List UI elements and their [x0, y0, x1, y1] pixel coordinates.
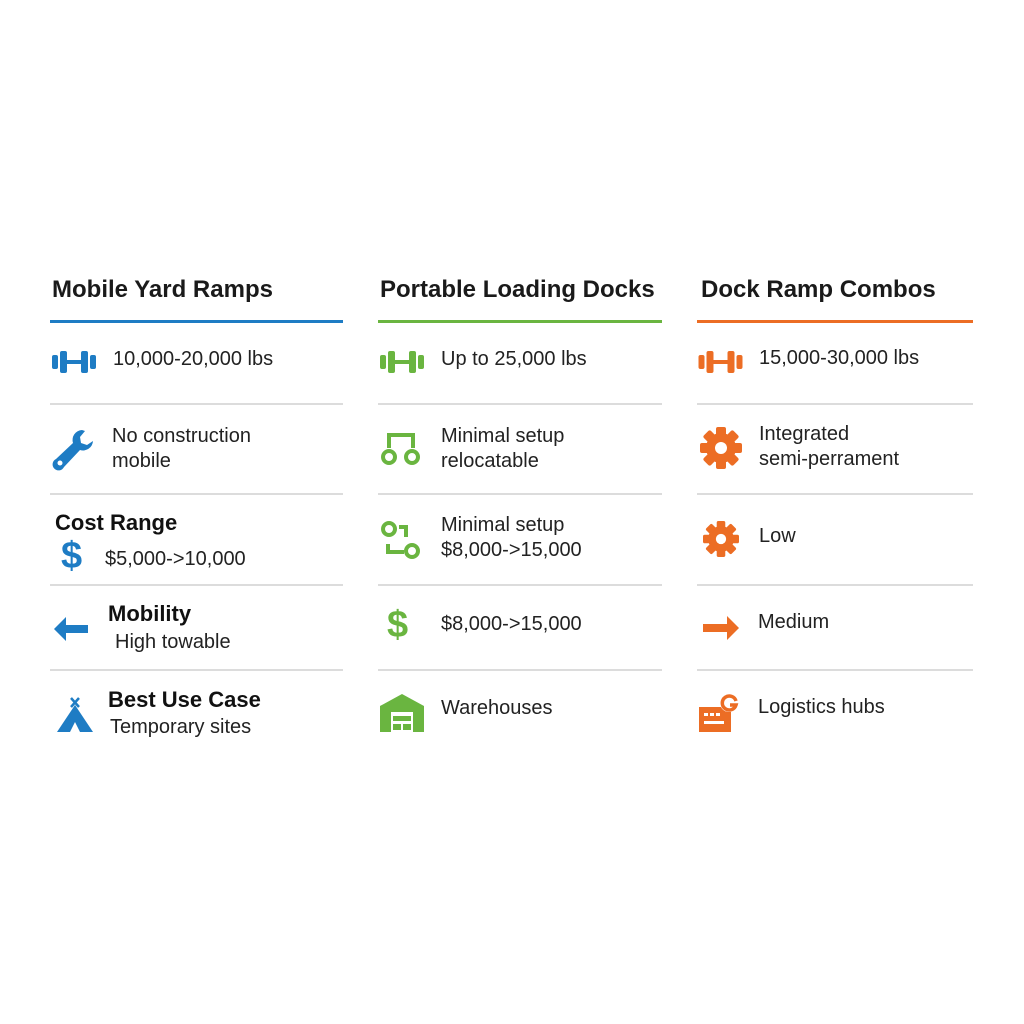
- icon: dumbbell green: [380, 351, 424, 373]
- text: setup cost: [441, 514, 582, 561]
- text: use case: Logistics hubs: [758, 696, 885, 718]
- icon: dumbbell blue: [52, 351, 96, 373]
- text: capacity: Up to 25,000 lbs: [441, 348, 587, 370]
- text: setup: [112, 425, 251, 472]
- panel: portable loading docks: [378, 276, 662, 732]
- text: capacity: 15,000-30,000 lbs: [759, 347, 919, 369]
- text: setup: [441, 425, 564, 472]
- icon: logistics hub: [699, 694, 738, 732]
- text: mobility: Medium: [758, 611, 829, 633]
- heading: mobile yard ramps: Mobile Yard Ramps: [52, 276, 273, 303]
- icon: warehouse: [380, 694, 424, 732]
- text: setup: Minimal setup: [441, 425, 564, 447]
- icon: route: [381, 521, 420, 559]
- heading: portable loading docks: Portable Loading Docks: [380, 276, 655, 303]
- text: setup cost: $8,000->15,000: [441, 539, 582, 561]
- text: capacity: 10,000-20,000 lbs: [113, 348, 273, 370]
- text: best use case: Best Use Case: [108, 687, 261, 712]
- panel: mobile yard ramps: High towable: [115, 631, 231, 653]
- icon: wrench: [52, 430, 93, 470]
- icon: arrow right: [703, 616, 739, 640]
- text: setup: mobile: [112, 450, 171, 472]
- icon: gear small: [703, 521, 739, 557]
- text: mobility: Mobility: [108, 601, 191, 626]
- icon: arrow left: [54, 617, 88, 641]
- icon: tent: [57, 697, 93, 732]
- panel: dock ramp combos: [697, 276, 973, 732]
- icon: dumbbell orange: [698, 351, 742, 373]
- text: setup cost: Minimal setup: [441, 514, 564, 536]
- text: cost: Low: [759, 525, 796, 547]
- icon: trailer: [381, 433, 420, 465]
- panel: mobile yard ramps: [50, 276, 343, 738]
- text: cost: $8,000->15,000: [441, 613, 582, 635]
- text: setup: semi-perrament: [759, 448, 899, 470]
- text: setup: [759, 423, 899, 470]
- icon: gear large: [700, 427, 742, 469]
- text: setup: Integrated: [759, 423, 849, 445]
- text: setup: relocatable: [441, 450, 539, 472]
- text: cost: $5,000->10,000: [105, 548, 246, 570]
- text: use case: Warehouses: [441, 697, 553, 719]
- text: cost range heading: Cost Range: [55, 510, 177, 535]
- text: setup: No construction: [112, 425, 251, 447]
- panel: mobile yard ramps: Temporary sites: [110, 716, 251, 738]
- icon: dollar blue: $: [61, 535, 82, 577]
- icon: dollar green: $: [387, 604, 408, 646]
- heading: dock ramp combos: Dock Ramp Combos: [701, 276, 936, 303]
